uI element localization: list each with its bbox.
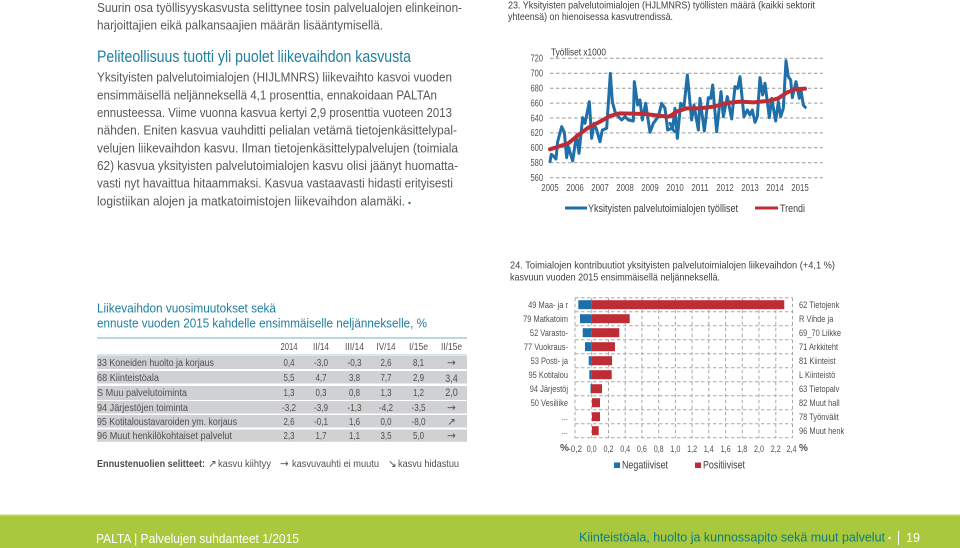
legend: forecast arrows [97, 458, 459, 470]
legend: bar chart: Negatiiviset [622, 460, 668, 472]
footer: section title: Kiinteistöala, huolto ja kunnossapito sekä muut palvelut [579, 530, 885, 544]
x axis labels: 1,2 [687, 444, 697, 455]
caption: figure 24: 24. Toimialojen kontribuutiot yksityisten palvelutoimialojen liikevaihdon (+4,1 %) [510, 260, 835, 271]
right category labels: 96 Muut henk [799, 425, 845, 436]
row: 33 Koneiden huolto ja korjaus [97, 356, 467, 369]
x axis labels: 2,0 [754, 444, 764, 455]
x axis labels: 2005 [541, 183, 559, 194]
legend: bar chart: Positiiviset [703, 460, 745, 472]
x axis labels: 2014 [766, 183, 784, 194]
table header [280, 342, 462, 353]
chart title: Työlliset x1000 [551, 46, 606, 58]
line chart: employment [530, 46, 823, 215]
row: 33 Koneiden huolto ja korjaus: 8,1 [413, 358, 424, 369]
table header: 2014 [280, 342, 298, 353]
x axis labels: 0,8 [654, 444, 664, 455]
right category labels: 69_70 Liikke [799, 327, 841, 338]
text block: body paragraph: nähden. Eniten kasvua vauhditti pelialan vetämä tietojenkäsittelypal- [97, 123, 457, 138]
left category labels: ... [562, 411, 568, 422]
table header: II/14 [313, 342, 329, 353]
footer: page number: 19 [906, 531, 920, 545]
y axis labels [530, 54, 543, 184]
bar chart: contributions [523, 298, 845, 472]
row: 94 Järjestöjen toiminta: -4,2 [379, 403, 393, 414]
x axis labels [541, 183, 809, 194]
row: 94 Järjestöjen toiminta: -3,2 [282, 403, 296, 414]
right category labels: 62 Tietojenk [799, 299, 840, 310]
y axis labels: 720 [530, 54, 543, 64]
row: 96 Muut henkilökohtaiset palvelut: 96 Muut henkilökohtaiset palvelut [97, 431, 232, 442]
right category labels: R Vihde ja [799, 313, 834, 324]
x axis labels: 2008 [616, 183, 634, 194]
row: 96 Muut henkilökohtaiset palvelut: 3,5 [380, 431, 392, 442]
y axis labels: 640 [530, 113, 543, 124]
row: 95 Kotitaloustavaroiden ym. korjaus: 95 Kotitaloustavaroiden ym. korjaus [97, 417, 237, 428]
y axis labels: 620 [530, 128, 543, 139]
row: 96 Muut henkilökohtaiset palvelut [97, 430, 467, 442]
row: 68 Kiinteistöala: 2,9 [413, 373, 424, 384]
legend: forecast arrows: Ennustenuolien selitteet: [97, 459, 205, 470]
heading: Peliteollisuus: Peliteollisuus tuotti yli puolet liikevaihdon kasvusta [97, 47, 412, 66]
row: 96 Muut henkilökohtaiset palvelut: 2,3 [284, 431, 295, 442]
row: 94 Järjestöjen toiminta: -3,5 [412, 403, 426, 414]
positive bars [591, 300, 784, 435]
left category labels: 77 Vuokraus- [524, 341, 568, 352]
x axis labels: 1,6 [721, 444, 731, 455]
negative bars [578, 300, 592, 393]
row: 95 Kotitaloustavaroiden ym. korjaus: 0,0 [380, 417, 392, 428]
table header: III/14 [345, 342, 364, 353]
left category labels: 95 Kotitalou [529, 369, 568, 380]
table header: II/15e [441, 342, 462, 353]
footer: publication name: PALTA | Palvelujen suhdanteet 1/2015 [96, 532, 299, 546]
x axis labels: 0,6 [637, 444, 647, 455]
row: 68 Kiinteistöala: 3,4 [445, 373, 458, 385]
text block: body paragraph [97, 70, 459, 208]
text block: body paragraph: Yksityisten palvelutoimialojen (HIJLMNRS) liikevaihto kasvoi vuoden [97, 70, 452, 85]
y axis labels: 660 [530, 98, 543, 109]
x axis labels: 2,4 [786, 444, 797, 455]
x axis labels: 1,0 [670, 444, 680, 455]
row: 33 Koneiden huolto ja korjaus: → [447, 357, 456, 369]
x axis labels: % [799, 443, 808, 454]
text block: intro paragraph end [97, 0, 462, 33]
row: 95 Kotitaloustavaroiden ym. korjaus: 2,6 [284, 417, 295, 428]
row: 33 Koneiden huolto ja korjaus: 0,4 [284, 358, 295, 369]
text block: body paragraph: vasti nyt havaittua hitaammaksi. Kasvua vastaavasti hidasti erityisesti [97, 176, 453, 191]
y axis labels: 560 [530, 173, 543, 184]
row: S Muu palvelutoiminta: 1,2 [413, 388, 424, 399]
legend: forecast arrows: → [280, 458, 289, 470]
x axis labels: 0,0 [587, 444, 597, 455]
table heading: ennuste vuoden 2015 kahdelle ensimmäiselle neljännekselle, % [97, 316, 427, 330]
x axis labels: 0,4 [620, 444, 631, 455]
caption: figure 24 [510, 260, 835, 284]
x axis labels: 2010 [666, 183, 684, 194]
left category labels: 52 Varasto- [530, 327, 568, 338]
right category labels: 63 Tietopalv [799, 383, 840, 394]
row: 95 Kotitaloustavaroiden ym. korjaus: 1,6 [349, 417, 360, 428]
text block: body paragraph: ensimmäisellä neljänneksellä 4,1 prosenttia, ennakoidaan PALTAn [97, 87, 437, 102]
x axis labels: 2009 [641, 183, 659, 194]
x axis labels: 1,4 [704, 444, 714, 455]
left category labels: 53 Posti- ja [531, 355, 568, 366]
x axis labels: 2007 [591, 183, 609, 194]
legend: forecast arrows: ↘ [388, 458, 397, 470]
x axis labels: % [560, 443, 569, 454]
row: 94 Järjestöjen toiminta: -1,3 [348, 403, 362, 414]
row: 94 Järjestöjen toiminta: -3,9 [314, 403, 328, 414]
text block: intro paragraph end: harjoittajien eikä palkansaajien määrän lisääntymisellä. [97, 18, 383, 33]
left category labels: 79 Matkatoim [523, 313, 568, 324]
table header: IV/14 [376, 342, 396, 353]
left category labels: 49 Maa- ja r [528, 299, 568, 310]
row: S Muu palvelutoiminta: 1,3 [380, 388, 392, 399]
y axis labels: 600 [530, 143, 543, 154]
caption: figure 23: yhteensä) on hienoisessa kasvutrendissä. [508, 12, 673, 23]
x axis labels: 2015 [791, 183, 809, 194]
row: S Muu palvelutoiminta [97, 386, 467, 400]
row: 96 Muut henkilökohtaiset palvelut: 1,1 [349, 431, 360, 442]
row: 94 Järjestöjen toiminta: → [447, 402, 456, 414]
x axis labels: 0,2 [604, 444, 614, 455]
legend: employment chart: Yksityisten palvelutoimialojen työlliset [588, 203, 738, 215]
legend: employment chart: Trendi [780, 203, 805, 215]
row: 95 Kotitaloustavaroiden ym. korjaus: ↗ [447, 416, 456, 428]
right category labels: 82 Muut hall [799, 397, 840, 408]
legend: forecast arrows: kasvu hidastuu [398, 459, 459, 470]
y axis labels: 700 [530, 68, 543, 80]
caption: figure 24: kasvuun vuoden 2015 ensimmäisellä neljänneksellä. [510, 273, 720, 284]
text block: body paragraph: logistiikan alojen ja matkatoimistojen liikevaihdon alamäki. [97, 193, 405, 208]
row: 33 Koneiden huolto ja korjaus: 33 Koneiden huolto ja korjaus [97, 358, 214, 369]
row: 96 Muut henkilökohtaiset palvelut: 1,7 [316, 431, 327, 442]
text block: body paragraph: ennusteessa. Viime vuonna kasvua kertyi 2,9 prosenttia vuoteen 2013 [97, 105, 452, 120]
row: 68 Kiinteistöala: 68 Kiinteistöala [97, 373, 159, 384]
text block: intro paragraph end: Suurin osa työllisyyskasvusta selittynee tosin palvelualojen elinkeinon- [97, 0, 462, 15]
right category labels: 81 Kiinteist [799, 355, 836, 366]
x axis labels: 2012 [716, 183, 734, 194]
right category labels: L Kiinteistö [799, 369, 835, 380]
text block: body paragraph: 62) kasvua yksityisten palvelutoimialojen kasvu olisi jäänyt huomatta- [97, 158, 458, 173]
left category labels: 50 Vesiliike [531, 397, 568, 408]
left category labels: ... [562, 425, 568, 436]
right category labels: 71 Arkkiteht [799, 341, 839, 352]
legend: forecast arrows: kasvu kiihtyy [218, 459, 272, 470]
left category labels [523, 299, 568, 436]
text block: body paragraph: velujen liikevaihdon kasvu. Ilman tietojenkäsittelypalvelujen (toimiala [97, 140, 459, 155]
x axis labels: 2,2 [771, 444, 781, 455]
row: 95 Kotitaloustavaroiden ym. korjaus: -8,0 [412, 417, 426, 428]
table heading [97, 302, 427, 330]
right category labels [799, 299, 845, 436]
right category labels: 78 Työnvälit [799, 411, 839, 422]
row: 94 Järjestöjen toiminta [97, 401, 467, 414]
row: S Muu palvelutoiminta: 1,3 [284, 388, 295, 399]
caption: figure 23 [508, 0, 815, 23]
row: 33 Koneiden huolto ja korjaus: 2,6 [380, 358, 392, 369]
table header: I/15e [409, 342, 428, 353]
row: 33 Koneiden huolto ja korjaus: -0,3 [348, 358, 362, 369]
x axis labels: 2006 [566, 183, 584, 194]
row: 96 Muut henkilökohtaiset palvelut: 5,0 [413, 431, 424, 442]
red series: trend [550, 89, 805, 149]
x axis labels: 2013 [741, 183, 759, 194]
row: S Muu palvelutoiminta: S Muu palvelutoiminta [97, 388, 187, 399]
left category labels: 94 Järjestöj [530, 383, 568, 394]
y axis labels: 580 [530, 158, 543, 169]
row: 95 Kotitaloustavaroiden ym. korjaus: -0,1 [314, 417, 328, 428]
legend: forecast arrows: kasvuvauhti ei muutu [292, 459, 379, 470]
caption: figure 23: 23. Yksityisten palvelutoimialojen (HJLMNRS) työllisten määrä (kaikki sektorit [508, 0, 815, 11]
x axis labels: 2011 [691, 183, 709, 194]
row: 95 Kotitaloustavaroiden ym. korjaus [97, 415, 467, 428]
row: S Muu palvelutoiminta: 0,8 [349, 388, 360, 399]
row: 33 Koneiden huolto ja korjaus: -3,0 [314, 358, 328, 369]
legend: forecast arrows: ↗ [208, 458, 217, 470]
table heading: Liikevaihdon vuosimuutokset sekä [97, 302, 276, 316]
row: 68 Kiinteistöala: 3,8 [349, 373, 360, 384]
row: 94 Järjestöjen toiminta: 94 Järjestöjen toiminta [97, 403, 188, 414]
row: S Muu palvelutoiminta: 0,3 [316, 388, 327, 399]
row: 68 Kiinteistöala: 4,7 [316, 373, 327, 384]
x axis labels [560, 443, 808, 455]
y axis labels: 680 [530, 84, 543, 94]
row: 68 Kiinteistöala: 5,5 [284, 373, 295, 384]
x axis labels: 1,8 [737, 444, 747, 455]
legend: bar chart [614, 460, 745, 472]
x axis labels: -0,2 [568, 444, 582, 455]
row: 68 Kiinteistöala: 7,7 [380, 373, 392, 384]
row: 96 Muut henkilökohtaiset palvelut: → [447, 430, 456, 442]
row: 68 Kiinteistöala [97, 371, 467, 385]
row: S Muu palvelutoiminta: 2,0 [445, 387, 458, 399]
blue series: employed [550, 61, 805, 162]
footer band [0, 514, 960, 548]
table: revenue changes [97, 338, 467, 442]
